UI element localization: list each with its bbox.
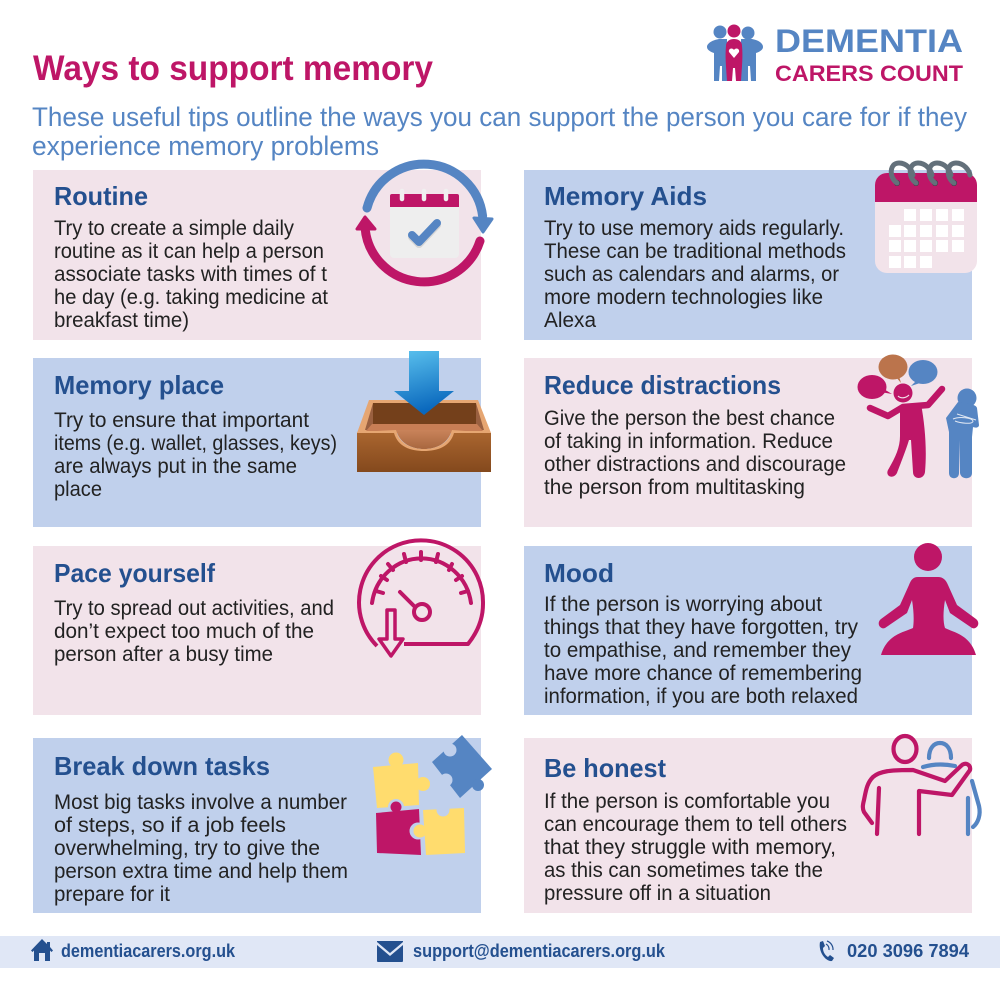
text: reduce distractions [544,407,846,499]
subtitle: experience memory problems [32,131,379,161]
text: be honest: as this can sometimes take the [544,859,823,882]
logo: Dementia Carers Count: CARERS COUNT [775,61,964,86]
heading: routine: Routine [54,181,148,211]
icon: talking person and withdrawn person [858,354,979,478]
icon: wall calendar [875,163,977,273]
text: pace yourself [54,597,334,666]
subtitle [32,102,967,161]
text: reduce distractions: the person from multitasking [544,476,805,499]
panel: memory aids [524,163,977,340]
text: memory aids [544,217,846,332]
text: pace yourself: person after a busy time [54,643,273,666]
heading: be honest: Be honest [544,753,666,783]
text: mood: have more chance of remembering [544,662,862,685]
icon: arm around shoulder [863,736,980,834]
subtitle: These useful tips outline the ways you can support the person you care for if they [32,102,967,132]
text: break down tasks [54,791,348,906]
panel: pace yourself [33,540,483,715]
panel: mood [524,543,978,715]
text: mood: If the person is worrying about [544,593,822,616]
icon: home [31,939,53,961]
text: routine: he day (e.g. taking medicine at [54,286,328,309]
heading: memory place: Memory place [54,370,224,400]
text: be honest: pressure off in a situation [544,882,771,905]
icon: inbox tray with arrow [357,351,491,472]
text: memory place: are always put in the same [54,455,297,478]
text: pace yourself: don’t expect too much of the [54,620,314,643]
phone number: 020 3096 7894 [847,941,969,961]
text: routine: breakfast time) [54,309,189,332]
text: routine: Try to create a simple daily [54,217,294,240]
text: reduce distractions: of taking in information. Reduce [544,430,833,453]
text: be honest: If the person is comfortable you [544,790,830,813]
text: be honest: can encourage them to tell others [544,813,847,836]
heading: pace yourself: Pace yourself [54,558,215,588]
heading: reduce distractions: Reduce distractions [544,370,781,400]
text: memory place: Try to ensure that important [54,409,309,432]
text: memory aids: such as calendars and alarms, or [544,263,839,286]
text: memory place: items (e.g. wallet, glasses, keys) [54,432,337,455]
text: pace yourself: Try to spread out activities, and [54,597,334,620]
footer bar [0,936,1000,968]
icon: meditating person [879,543,978,655]
text: memory place: place [54,478,102,501]
logo: Dementia Carers Count [707,23,964,86]
text: memory aids: These can be traditional methods [544,240,846,263]
text: reduce distractions: Give the person the best chance [544,407,835,430]
text: reduce distractions: other distractions and discourage [544,453,846,476]
text: mood [544,593,862,708]
text: break down tasks: overwhelming, try to give the [54,837,320,860]
heading: memory aids: Memory Aids [544,181,707,211]
text: memory place [54,409,337,501]
text: memory aids: more modern technologies like [544,286,823,309]
text: break down tasks: of steps, so if a job feels [54,814,286,837]
text: memory aids: Try to use memory aids regularly. [544,217,844,240]
email: support@dementiacarers.org.uk [413,941,666,961]
text: break down tasks: person extra time and help them [54,860,348,883]
panel: reduce distractions [524,354,979,527]
text: break down tasks: Most big tasks involve a number [54,791,347,814]
panel: break down tasks [33,735,492,913]
text: mood: things that they have forgotten, try [544,616,858,639]
panel: memory place [33,351,491,527]
text: mood: to empathise, and remember they [544,639,851,662]
text: memory aids: Alexa [544,309,596,332]
text: routine: associate tasks with times of t [54,263,327,286]
text: routine: routine as it can help a person [54,240,324,263]
heading: break down tasks: Break down tasks [54,751,270,781]
text: be honest [544,790,847,905]
heading: mood: Mood [544,558,614,588]
icon: speedometer with down arrow [359,540,483,656]
text: be honest: that they struggle with memory, [544,836,836,859]
icon: phone [820,941,834,961]
panel: be honest [524,736,980,913]
icon: calendar with cycle arrows [357,164,492,282]
text: break down tasks: prepare for it [54,883,170,906]
website: dementiacarers.org.uk [61,941,236,961]
text: mood: information, if you are both relaxed [544,685,858,708]
title: Ways to support memory [33,49,433,88]
icon: jigsaw pieces [373,735,492,855]
icon: envelope [377,941,403,962]
panel: routine [33,164,492,340]
logo: Dementia Carers Count: DEMENTIA [775,23,963,59]
text: routine [54,217,328,332]
